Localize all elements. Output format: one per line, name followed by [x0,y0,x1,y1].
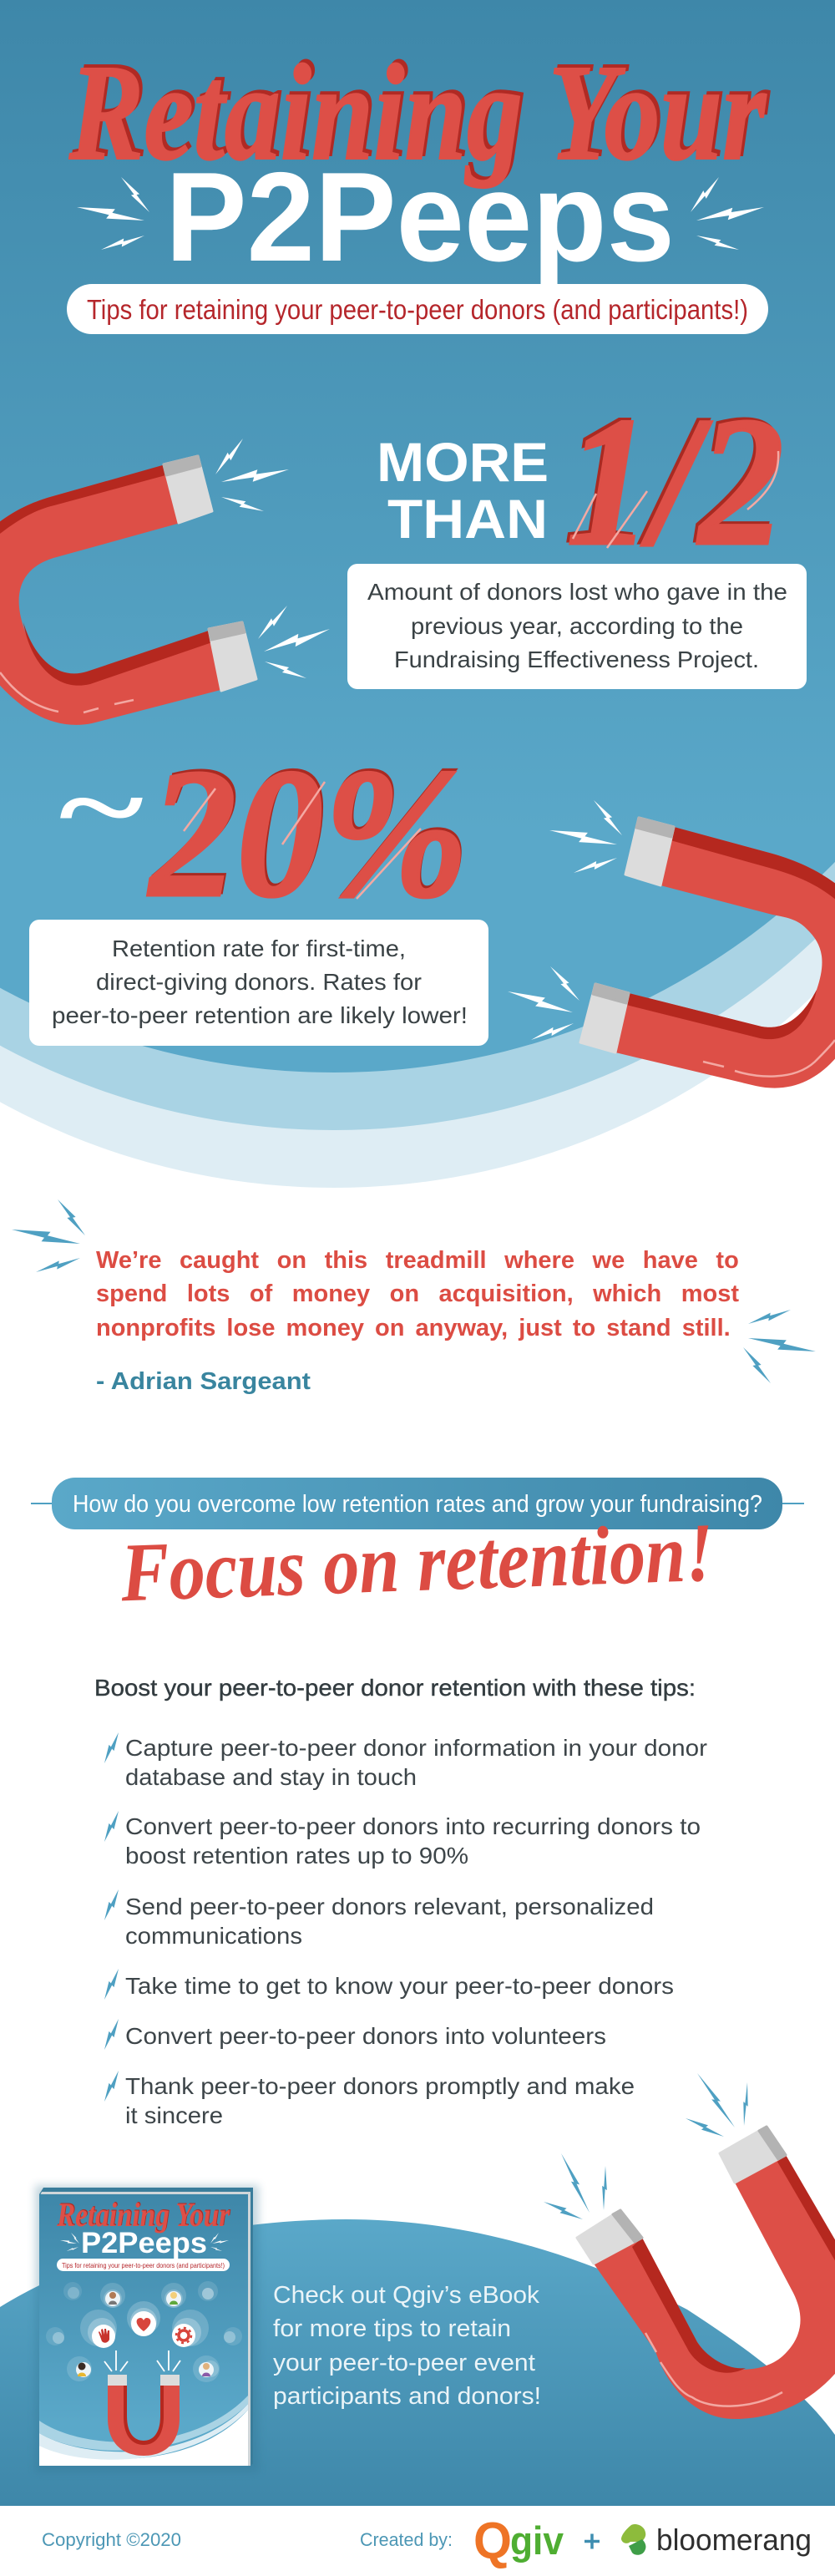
stat number: 20%: 20% [149,728,469,934]
icon: magnet right [580,818,835,1088]
plus sign [584,2534,600,2549]
magnet left lightning bolts [213,436,331,682]
footer created by: Created by: [360,2529,453,2550]
stat heading: more than: MORE [377,431,549,493]
tip 5: Convert peer-to-peer donors into volunteers [125,2023,606,2049]
tip 1: Capture peer-to-peer donor information in your donor [125,1735,707,1761]
title: P2Peeps: P2Peeps [165,146,675,288]
quote text [96,1247,739,1341]
stat heading: more than [377,431,549,550]
ebook call to action: your peer-to-peer event [273,2350,535,2376]
ebook cover [35,2185,259,2472]
logo: Qgiv: giv [510,2518,564,2563]
callout: donors lost [347,564,807,689]
stat number: 1/2: 1/2 [566,379,784,585]
stat number: 20%: 20% [147,731,468,936]
icon: magnet left [0,456,256,725]
stat heading: more than: THAN [387,488,548,550]
logo: Qgiv [473,2513,564,2570]
tip 6: Thank peer-to-peer donors promptly and make [125,2073,635,2099]
footer copyright: Copyright ©2020 [42,2529,181,2550]
stat number: 1/2: 1/2 [564,377,782,582]
subtitle pill [67,284,768,334]
icon: magnet bottom [577,2127,835,2419]
tip 1 [101,1731,707,1790]
ebook icon halos [46,2281,242,2382]
quote text: We’re caught on this treadmill where we have to [96,1247,739,1274]
callout: retention rate: Retention rate for first-time, [112,936,406,961]
logo: bloomerang leaf [621,2524,645,2555]
ebook title: Retaining Your [56,2196,230,2234]
logo: Qgiv: Q [473,2513,512,2570]
tip 2: Convert peer-to-peer donors into recurring donors to [125,1813,701,1839]
bottom blue hill [0,2219,835,2506]
callout: donors lost: previous year, according to the [411,613,743,639]
ebook call to action: Check out Qgiv’s eBook [273,2282,540,2309]
tip 6 [101,2069,635,2128]
ebook call to action: participants and donors! [273,2383,541,2410]
subtitle pill: Tips for retaining your peer-to-peer donors (and participants!) [87,294,748,325]
tips list [101,1731,707,2128]
tip 3: Send peer-to-peer donors relevant, personalized [125,1894,654,1919]
question banner: How do you overcome low retention rates and grow your fundraising? [73,1491,762,1518]
tip 5 [101,2017,606,2051]
callout: retention rate: direct-giving donors. Rates for [96,969,422,995]
callout: donors lost: Fundraising Effectiveness Project. [394,647,759,672]
quote attribution: - Adrian Sargeant [96,1368,311,1395]
logo: bloomerang wordmark: bloomerang [656,2523,812,2557]
tips heading: Boost your peer-to-peer donor retention with these tips: [94,1675,696,1701]
tip 2: boost retention rates up to 90% [125,1843,468,1869]
magnet bottom lightning bolts [542,2071,750,2223]
tip 6: it sincere [125,2102,223,2128]
ebook icons [76,2291,214,2377]
quote text: spend lots of money on acquisition, which most [96,1280,739,1307]
title lightning bolts [76,175,765,253]
callout: retention rate: peer-to-peer retention are likely lower! [52,1002,468,1028]
tip 1: database and stay in touch [125,1764,417,1790]
question banner [31,1478,804,1529]
ebook call to action: for more tips to retain [273,2315,511,2342]
quote lightning bolts [11,1197,817,1386]
heading: focus on retention: Focus on retention! [119,1506,715,1619]
tip 4 [101,1967,674,2001]
ebook title: Retaining Your [57,2195,230,2233]
ebook magnet [104,2350,180,2456]
callout: donors lost: Amount of donors lost who gave in the [367,579,787,605]
ebook title: Tips for retaining your peer-to-peer donors (and participants!) [62,2261,225,2269]
ebook title: P2Peeps [81,2227,207,2259]
tip 2 [101,1809,701,1869]
ebook bolts [60,2232,229,2252]
stat tilde: ~ [53,748,146,868]
tip 3 [101,1888,654,1949]
magnet right lightning bolts [506,798,625,1043]
quote text: nonprofits lose money on anyway, just to stand still. [96,1315,731,1341]
header background with curved bands [0,0,835,1188]
tip 3: communications [125,1923,302,1949]
tip 4: Take time to get to know your peer-to-peer donors [125,1973,674,1999]
ebook title [56,2195,230,2271]
ebook call to action [273,2282,541,2410]
callout: retention rate [29,920,488,1046]
